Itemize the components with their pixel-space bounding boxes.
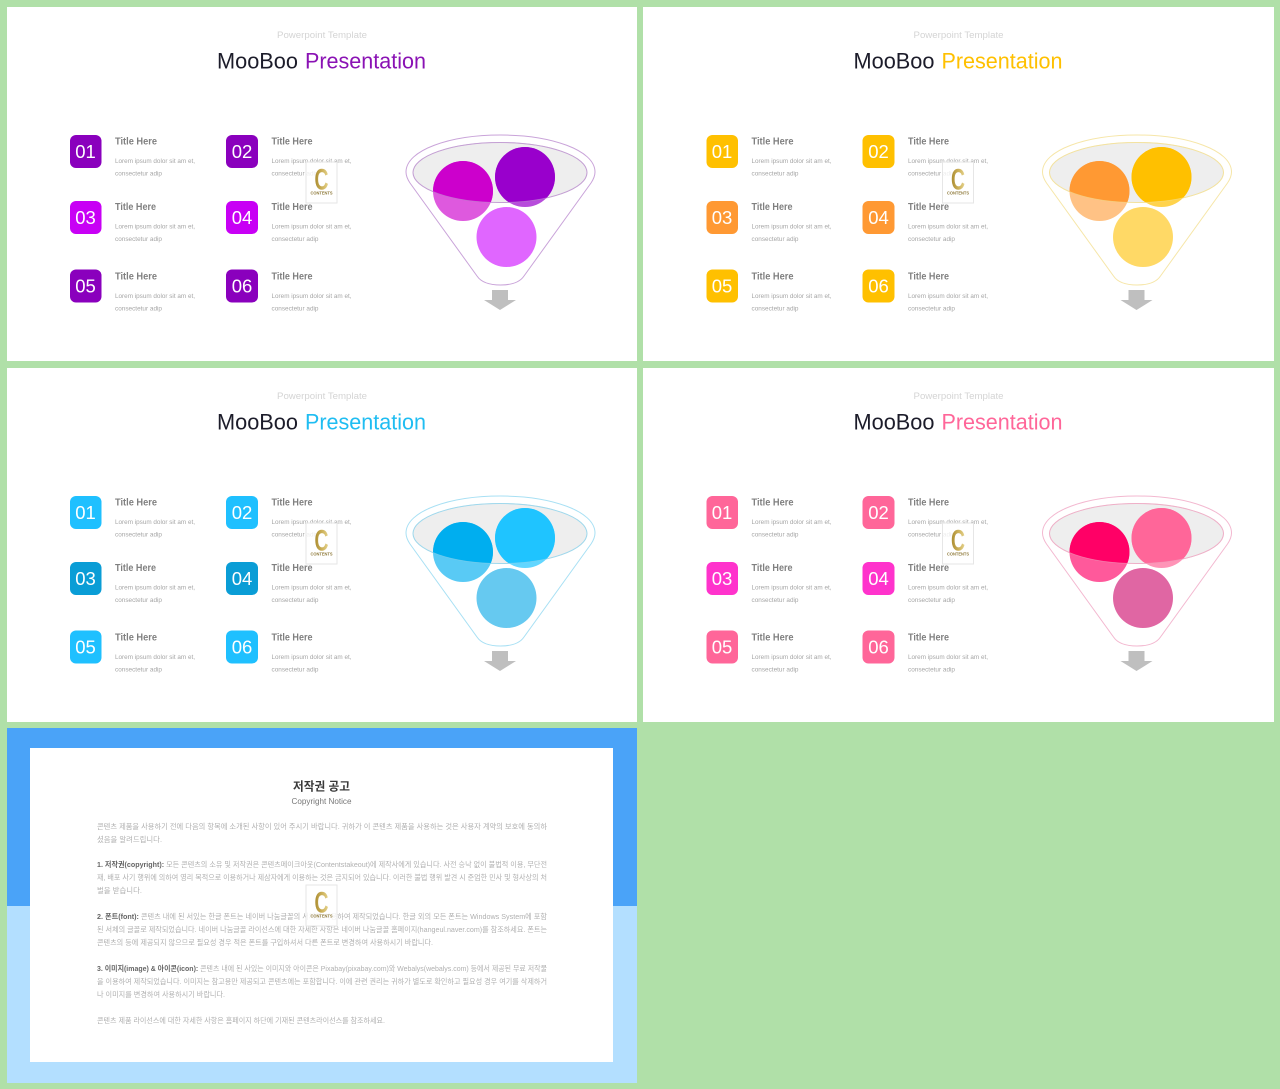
closing line: 콘텐츠 제품 라이선스에 대한 자세한 사항은 홈페이지 하단에 기재된 콘텐츠라이선스를 참조하세요. — [97, 1015, 385, 1025]
section 2: font: 된 서체의 글꼴로 제작되었습니다. 네이버 나눔글꼴 라이선스에 대한 자세한 사항은 네이버 나눔글꼴 홈페이지(hangeul.naver.com)를 참조하세요. 폰트는 — [97, 924, 547, 934]
item 04 text: consectetur adip — [272, 236, 319, 243]
badge 04: 04 — [868, 207, 889, 228]
badge 03: 03 — [75, 207, 96, 228]
title: Presentation — [942, 410, 1062, 434]
title: Presentation — [305, 48, 426, 74]
item 05 text: consectetur adip — [115, 306, 162, 312]
item 03 text: Title Here — [115, 202, 156, 213]
item 01 text: Lorem ipsum dolor sit am et, — [752, 519, 832, 526]
item 06 text: consectetur adip — [272, 666, 319, 674]
badge 05: 05 — [75, 636, 96, 658]
item 01 text: Lorem ipsum dolor sit am et, — [752, 158, 832, 165]
item 02 text: Title Here — [908, 136, 949, 148]
item 05 text: consectetur adip — [752, 306, 799, 312]
item 05 text: Title Here — [115, 632, 157, 644]
item 06 text — [272, 632, 352, 674]
item 05 text: Lorem ipsum dolor sit am et, — [752, 654, 832, 661]
section 3: image and icon: 3. 이미지(image) & 아이콘(icon): 콘텐츠 내에 된 사있는 이미지와 아이콘은 Pixabay(pixabay.com)와 Webalys(webalys.com) 등에서 제공된 무료 저작물 — [97, 963, 547, 973]
item 03 text: consectetur adip — [115, 597, 162, 604]
item 02 text: Lorem ipsum dolor sit am et, — [272, 519, 352, 526]
item 01 text — [115, 136, 195, 178]
item 01 text — [752, 136, 832, 178]
item 06 text — [908, 632, 988, 674]
badge 04 — [226, 201, 258, 234]
badge 01 — [70, 496, 102, 529]
kicker: Powerpoint Template — [914, 391, 1004, 401]
item 05 text — [752, 632, 832, 674]
item 02 text — [272, 498, 352, 538]
watermark — [942, 523, 974, 564]
badge 06 — [862, 630, 894, 664]
item 01 text: consectetur adip — [752, 170, 799, 178]
badge 06: 06 — [232, 636, 252, 658]
panel: copyright notice — [7, 728, 637, 1083]
item 03 text: consectetur adip — [115, 236, 162, 243]
item 03 text — [115, 202, 195, 243]
item 02 text — [272, 136, 352, 178]
item 03 text: Title Here — [752, 202, 793, 213]
item 06 text: Title Here — [908, 272, 949, 282]
badge 03: 03 — [75, 568, 96, 589]
item 01 text: Title Here — [115, 136, 157, 148]
item 05 text: Title Here — [752, 272, 794, 282]
section 1: copyright — [97, 859, 547, 895]
badge 03 — [706, 201, 738, 234]
watermark — [306, 885, 337, 926]
item 03 text: Lorem ipsum dolor sit am et, — [115, 584, 195, 592]
badge 06 — [862, 270, 894, 302]
badge 05 — [706, 630, 738, 664]
item 04 text — [908, 563, 988, 604]
badge 05 — [70, 630, 102, 664]
section 1: copyright: 1. 저작권(copyright): 모든 콘텐츠의 소유 및 저작권은 콘텐츠메이크아웃(Contentstakeout)에 제작사에게 있습니다. 사전 승낙 없이 불법적 이용, 무단전 — [97, 859, 547, 869]
item 06 text: consectetur adip — [908, 306, 955, 312]
panel: blue slide — [7, 368, 637, 722]
watermark: C — [314, 164, 328, 196]
badge 04: 04 — [232, 207, 252, 228]
badge 06: 06 — [232, 276, 252, 296]
badge 05: 05 — [712, 276, 732, 296]
badge 04: 04 — [868, 568, 889, 589]
badge 03: 03 — [712, 568, 732, 589]
item 02 text: Title Here — [272, 136, 313, 148]
title: MooBoo — [854, 48, 934, 74]
badge 01 — [70, 135, 102, 168]
badge 06 — [226, 630, 258, 664]
item 04 text: Lorem ipsum dolor sit am et, — [272, 224, 352, 230]
badge 02 — [862, 135, 894, 168]
title: Presentation — [942, 48, 1062, 74]
watermark: CONTENTS — [310, 552, 333, 556]
item 06 text: Title Here — [272, 272, 313, 282]
item 02 text — [908, 498, 988, 538]
badge 06: 06 — [868, 636, 889, 658]
item 01 text: Title Here — [752, 136, 794, 148]
section 2: font: 콘텐츠의 등에 제공되지 않으므로 필요성 경우 적은 폰트를 구입하셔서 다른 폰트로 변경하여 사용하시기 바랍니다. — [97, 937, 433, 947]
funnel diagram — [406, 496, 595, 646]
title: MooBoo — [217, 410, 298, 434]
badge 02: 02 — [232, 141, 252, 162]
item 05 text — [752, 272, 832, 312]
item 04 text: Title Here — [272, 202, 313, 213]
section 2: font: 2. 폰트(font): 콘텐츠 내에 된 서있는 한글 폰트는 네이버 나눔글꼴의 서체를 사용하여 제작되었습니다. 한글 외의 모든 폰트는 Windows System에 포함 — [97, 911, 547, 921]
item 06 text: consectetur adip — [272, 306, 319, 312]
arrow: down — [1120, 651, 1152, 671]
item 06 text: consectetur adip — [908, 666, 955, 674]
item 06 text — [908, 272, 988, 312]
item 04 text: Lorem ipsum dolor sit am et, — [272, 584, 352, 592]
item 01 text: Lorem ipsum dolor sit am et, — [115, 158, 195, 165]
item 02 text: consectetur adip — [908, 170, 955, 178]
item 06 text: Title Here — [908, 632, 949, 644]
watermark — [306, 162, 337, 203]
item 01 text — [752, 498, 832, 538]
item 06 text: Lorem ipsum dolor sit am et, — [272, 293, 352, 300]
item 05 text: Title Here — [115, 272, 157, 282]
item 04 text: Lorem ipsum dolor sit am et, — [908, 224, 988, 230]
badge 01 — [706, 135, 738, 168]
item 04 text — [908, 202, 988, 243]
item 02 text: consectetur adip — [272, 532, 319, 538]
watermark: CONTENTS — [310, 190, 333, 196]
item 01 text: consectetur adip — [115, 532, 162, 538]
funnel diagram — [1042, 135, 1232, 285]
section 3: image and icon — [97, 963, 547, 999]
title: Presentation — [305, 410, 426, 434]
section 3: image and icon: 나 이미지를 변경하여 사용하시기 바랍니다. — [97, 989, 225, 999]
watermark: CONTENTS — [947, 190, 969, 196]
funnel diagram — [406, 135, 595, 285]
item 04 text — [272, 202, 352, 243]
item 03 text: consectetur adip — [752, 597, 799, 604]
section 2: font — [97, 911, 547, 947]
item 06 text — [272, 272, 352, 312]
badge 01: 01 — [75, 141, 96, 162]
watermark: CONTENTS — [310, 914, 333, 918]
panel: yellow slide — [643, 7, 1274, 361]
item 03 text: Title Here — [115, 563, 156, 574]
item 01 text: consectetur adip — [115, 170, 162, 178]
item 02 text: Title Here — [908, 498, 949, 508]
watermark — [942, 162, 974, 203]
watermark: C — [314, 524, 328, 558]
section 1: copyright: 벌을 받습니다. — [97, 885, 142, 895]
watermark: C — [951, 164, 965, 196]
item 04 text: Title Here — [272, 563, 313, 574]
item 03 text: Lorem ipsum dolor sit am et, — [752, 584, 832, 592]
badge 06 — [226, 270, 258, 302]
item 03 text: Lorem ipsum dolor sit am et, — [752, 224, 832, 230]
badge 05 — [706, 270, 738, 302]
intro paragraph — [97, 821, 547, 844]
badge 03 — [706, 562, 738, 595]
title — [217, 48, 426, 74]
item 04 text: Title Here — [908, 563, 949, 574]
badge 02: 02 — [868, 141, 889, 162]
kicker: Powerpoint Template — [914, 30, 1004, 40]
item 06 text: Title Here — [272, 632, 313, 644]
arrow: down — [484, 651, 516, 671]
watermark — [306, 523, 337, 564]
badge 04 — [862, 201, 894, 234]
badge 02: 02 — [868, 502, 889, 523]
item 02 text — [908, 136, 988, 178]
intro paragraph: 콘텐츠 제품을 사용하기 전에 다음의 항목에 소개된 사항이 있어 주시기 바랍니다. 귀하가 이 콘텐츠 제품을 사용하는 것은 사용자 계약의 보호에 동의하 — [97, 821, 547, 831]
item 05 text: Lorem ipsum dolor sit am et, — [115, 293, 195, 300]
watermark: CONTENTS — [947, 552, 969, 556]
item 06 text: Lorem ipsum dolor sit am et, — [908, 654, 988, 661]
badge 04 — [862, 562, 894, 595]
item 04 text: consectetur adip — [272, 597, 319, 604]
item 05 text: Lorem ipsum dolor sit am et, — [115, 654, 195, 661]
panel: purple slide — [7, 7, 637, 361]
badge 02: 02 — [232, 502, 252, 523]
badge 02 — [226, 496, 258, 529]
badge 01: 01 — [712, 141, 732, 162]
badge 01: 01 — [75, 502, 96, 523]
badge 05 — [70, 270, 102, 302]
title: MooBoo — [217, 48, 298, 74]
badge 04: 04 — [232, 568, 252, 589]
item 04 text — [272, 563, 352, 604]
arrow: down — [484, 290, 516, 310]
title: MooBoo — [854, 410, 934, 434]
notice subheading: Copyright Notice — [292, 796, 352, 806]
panel: pink slide — [643, 368, 1274, 722]
item 04 text: Title Here — [908, 202, 949, 213]
badge 05: 05 — [712, 636, 732, 658]
item 05 text — [115, 632, 195, 674]
badge 03 — [70, 562, 102, 595]
badge 03: 03 — [712, 207, 732, 228]
badge 05: 05 — [75, 276, 96, 296]
item 01 text: Title Here — [752, 498, 794, 508]
title — [854, 48, 1062, 74]
item 05 text: Lorem ipsum dolor sit am et, — [752, 293, 832, 300]
item 01 text — [115, 498, 195, 538]
badge 03 — [70, 201, 102, 234]
item 03 text: consectetur adip — [752, 236, 799, 243]
item 02 text: Title Here — [272, 498, 313, 508]
watermark: C — [314, 886, 328, 920]
item 04 text: consectetur adip — [908, 236, 955, 243]
item 02 text: consectetur adip — [908, 532, 955, 538]
intro paragraph: 셨음을 알려드립니다. — [97, 834, 162, 844]
item 06 text: Lorem ipsum dolor sit am et, — [272, 654, 352, 661]
badge 02 — [226, 135, 258, 168]
item 05 text: consectetur adip — [752, 666, 799, 674]
badge 04 — [226, 562, 258, 595]
section 1: copyright: 재, 배포 사기 행위에 의하여 영리 목적으로 이용하거나 제삼자에게 이용하는 것은 금지되어 있습니다. 이러한 불법 행위 발견 시 준엄한 민사 및 형사상의 처 — [97, 872, 547, 882]
kicker: Powerpoint Template — [277, 391, 367, 401]
section 3: image and icon: 을 이용하여 제작되었습니다. 이미지는 참고용만 제공되고 콘텐츠에는 포함합니다. 이에 관련 권리는 귀하가 별도로 확인하고 필요성 경우 여기를 삭제하거 — [97, 976, 547, 986]
item 02 text: Lorem ipsum dolor sit am et, — [908, 519, 988, 526]
badge 01: 01 — [712, 502, 732, 523]
item 02 text: Lorem ipsum dolor sit am et, — [272, 158, 352, 165]
badge 06: 06 — [868, 276, 889, 296]
item 05 text: consectetur adip — [115, 666, 162, 674]
kicker: Powerpoint Template — [277, 30, 367, 40]
watermark: C — [951, 524, 965, 558]
item 03 text — [115, 563, 195, 604]
item 01 text: consectetur adip — [752, 532, 799, 538]
item 03 text — [752, 202, 832, 243]
item 04 text: Lorem ipsum dolor sit am et, — [908, 584, 988, 592]
item 05 text: Title Here — [752, 632, 794, 644]
item 03 text — [752, 563, 832, 604]
arrow: down — [1120, 290, 1152, 310]
item 03 text: Title Here — [752, 563, 793, 574]
item 02 text: consectetur adip — [272, 170, 319, 178]
title — [217, 410, 426, 434]
item 03 text: Lorem ipsum dolor sit am et, — [115, 224, 195, 230]
title — [854, 410, 1062, 434]
notice heading: 저작권 공고 — [293, 778, 350, 794]
funnel diagram — [1042, 496, 1232, 646]
item 04 text: consectetur adip — [908, 597, 955, 604]
item 06 text: Lorem ipsum dolor sit am et, — [908, 293, 988, 300]
item 01 text: Lorem ipsum dolor sit am et, — [115, 519, 195, 526]
item 05 text — [115, 272, 195, 312]
item 02 text: Lorem ipsum dolor sit am et, — [908, 158, 988, 165]
item 01 text: Title Here — [115, 498, 157, 508]
badge 01 — [706, 496, 738, 529]
badge 02 — [862, 496, 894, 529]
